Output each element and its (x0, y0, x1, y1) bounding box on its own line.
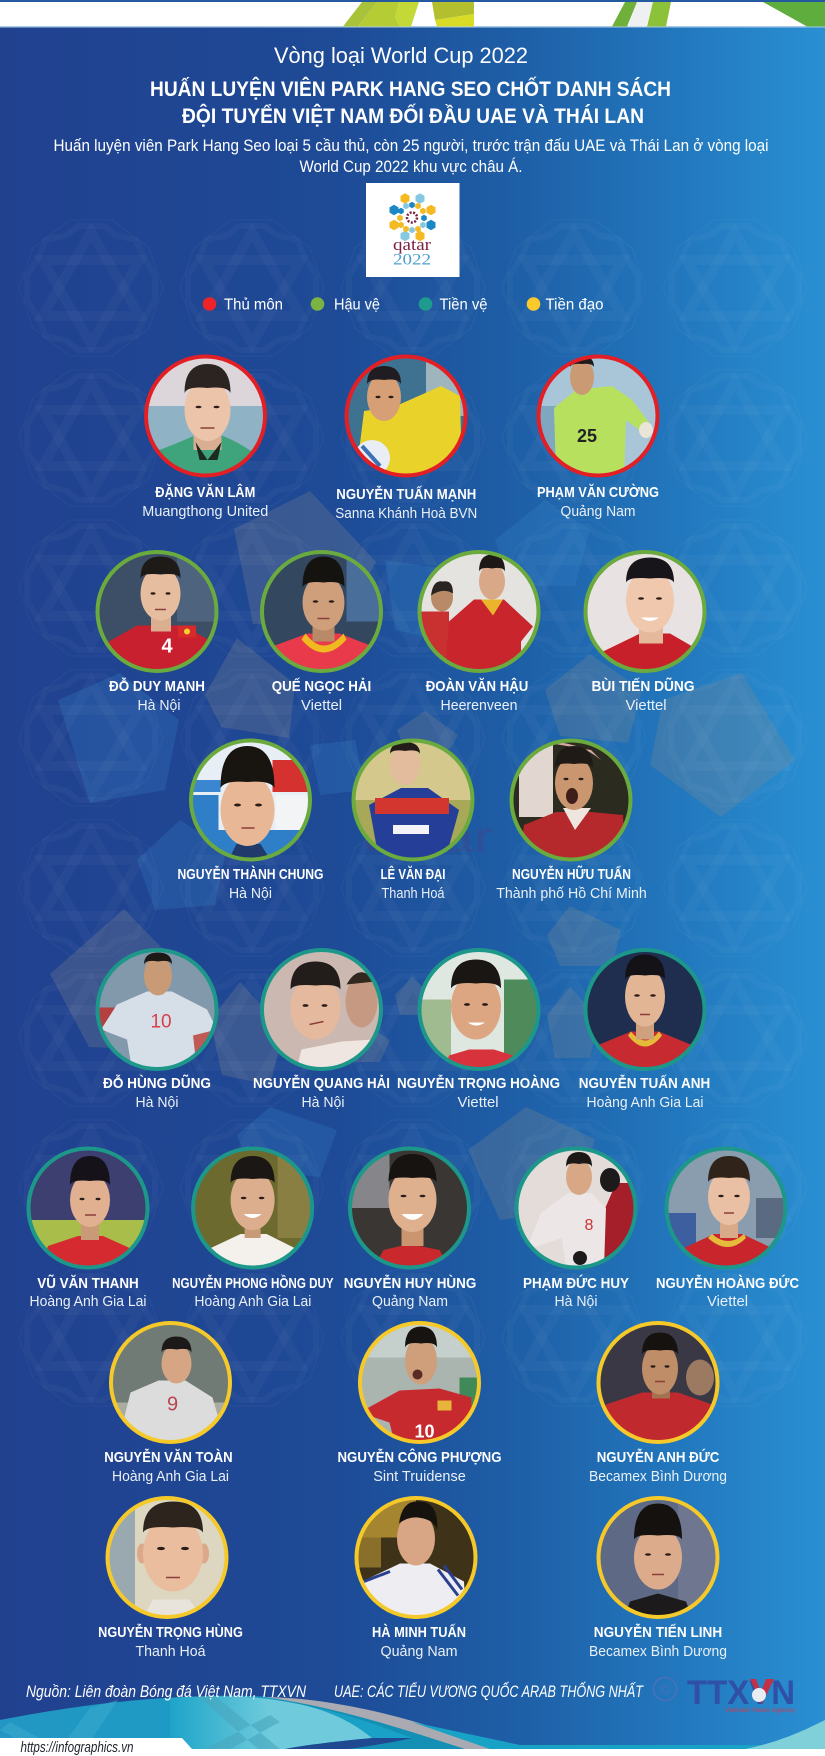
player: Nguyễn Tuấn Anh (579, 950, 710, 1111)
player: Nguyễn Công Phượng (338, 1322, 502, 1485)
player: Nguyễn Hữu Tuấn: Thành phố Hồ Chí Minh (496, 885, 647, 902)
player: Nguyễn Anh Đức (589, 1322, 727, 1485)
main heading line 2: ĐỘI TUYỂN VIỆT NAM ĐỐI ĐẦU UAE VÀ THÁI LAN (182, 104, 644, 128)
player: Nguyễn Hoàng Đức: Viettel (707, 1293, 748, 1310)
header text block (54, 43, 768, 176)
player: Phạm Văn Cường: 25 (577, 426, 597, 446)
player: Nguyễn Trọng Hoàng: NGUYỄN TRỌNG HOÀNG (397, 1075, 560, 1092)
player: Nguyễn Phong Hồng Duy: Hoàng Anh Gia Lai (194, 1293, 311, 1310)
legend: Tiền vệ (440, 296, 488, 314)
player: Quế Ngọc Hải: Viettel (301, 697, 342, 714)
player: Nguyễn Tuấn Mạnh (335, 356, 477, 522)
player: Nguyễn Huy Hùng: Quảng Nam (372, 1293, 448, 1310)
player: Phạm Đức Huy: PHẠM ĐỨC HUY (523, 1274, 629, 1292)
player: Nguyễn Quang Hải: NGUYỄN QUANG HẢI (253, 1075, 390, 1092)
player: Đỗ Hùng Dũng (97, 950, 217, 1111)
player: Phạm Văn Cường: PHẠM VĂN CƯỜNG (537, 483, 659, 501)
player: Bùi Tiến Dũng: Viettel (626, 697, 666, 714)
player: Phạm Đức Huy: Hà Nội (554, 1293, 598, 1310)
player: Nguyễn Trọng Hùng: NGUYỄN TRỌNG HÙNG (98, 1623, 243, 1641)
player: Nguyễn Hoàng Đức: NGUYỄN HOÀNG ĐỨC (656, 1274, 799, 1292)
player: Nguyễn Hữu Tuấn: NGUYỄN HỮU TUẤN (512, 865, 631, 883)
legend: Thủ môn (224, 296, 283, 314)
player: Đoàn Văn Hậu (419, 552, 539, 714)
Qatar 2022 logo (366, 183, 460, 277)
player: Nguyễn Trọng Hùng (98, 1498, 243, 1660)
player: Phạm Đức Huy (516, 1148, 636, 1310)
player: Hà Minh Tuấn: HÀ MINH TUẤN (372, 1624, 466, 1641)
player: Nguyễn Huy Hùng (344, 1148, 476, 1310)
faint qatar watermark: qatar (363, 813, 493, 862)
player: Phạm Văn Cường (537, 356, 659, 520)
top banner (0, 0, 825, 28)
player: Nguyễn Hoàng Đức (656, 1148, 799, 1310)
player: Nguyễn Văn Toàn (104, 1322, 233, 1485)
url tab: https://infographics.vn (20, 1740, 134, 1756)
player: Vũ Văn Thanh: Hoàng Anh Gia Lai (30, 1293, 146, 1310)
player: Đoàn Văn Hậu: Heerenveen (440, 697, 518, 714)
player: Nguyễn Quang Hải: Hà Nội (302, 1094, 344, 1111)
background: medallion pattern (19, 220, 807, 1406)
player: Đỗ Hùng Dũng: ĐỖ HÙNG DŨNG (103, 1074, 211, 1092)
player: Nguyễn Anh Đức: Becamex Bình Dương (589, 1468, 727, 1485)
player: Nguyễn Huy Hùng: NGUYỄN HUY HÙNG (344, 1274, 476, 1292)
player: Lê Văn Đại (353, 740, 473, 902)
intro line 1: Huấn luyện viên Park Hang Seo loại 5 cầu thủ, còn 25 người, trước trận đấu UAE và Thái Lan ở vòng loại (54, 137, 768, 155)
player: Bùi Tiến Dũng (585, 552, 705, 714)
player: Nguyễn Trọng Hoàng: Viettel (458, 1094, 498, 1111)
TTXVN logo: Vietnam News Agency (725, 1707, 796, 1714)
player: Nguyễn Công Phượng: 10 (414, 1422, 435, 1442)
player: Hà Minh Tuấn (356, 1498, 476, 1660)
intro line 2: World Cup 2022 khu vực châu Á. (300, 157, 522, 176)
abbreviation note: UAE: CÁC TIỂU VƯƠNG QUỐC ARAB THỐNG NHẤT (334, 1682, 644, 1701)
title kicker: Vòng loại World Cup 2022 (274, 43, 528, 68)
player: Phạm Văn Cường: Quảng Nam (560, 503, 636, 520)
player: Nguyễn Tiến Linh: Becamex Bình Dương (589, 1643, 727, 1660)
player: Nguyễn Công Phượng: NGUYỄN CÔNG PHƯỢNG (338, 1448, 502, 1466)
player: Nguyễn Văn Toàn: Hoàng Anh Gia Lai (112, 1468, 229, 1485)
player: Quế Ngọc Hải (262, 552, 382, 714)
player: Bùi Tiến Dũng: BÙI TIẾN DŨNG (592, 677, 694, 695)
player: Đỗ Hùng Dũng: 10 (150, 1012, 172, 1032)
player: Nguyễn Thành Chung: NGUYỄN THÀNH CHUNG (178, 866, 324, 883)
player: Nguyễn Thành Chung: Hà Nội (229, 885, 272, 902)
TTXVN logo: © (659, 1682, 671, 1699)
player: Nguyễn Thành Chung (178, 740, 324, 902)
TTXVN logo: TTXVN (687, 1674, 795, 1712)
Qatar 2022 logo: qatar (393, 235, 431, 254)
player: Đặng Văn Lâm: Muangthong United (142, 503, 268, 520)
legend (203, 296, 603, 314)
player: Nguyễn Tuấn Anh: Hoàng Anh Gia Lai (586, 1094, 704, 1111)
player: Quế Ngọc Hải: QUẾ NGỌC HẢI (272, 678, 371, 695)
player: Nguyễn Hữu Tuấn (496, 740, 647, 902)
player: Lê Văn Đại: LÊ VĂN ĐẠI (380, 865, 446, 883)
player: Đỗ Duy Mạnh: 4 (161, 636, 173, 658)
player: Nguyễn Tuấn Anh: NGUYỄN TUẤN ANH (579, 1075, 710, 1092)
player: Đặng Văn Lâm: ĐẶNG VĂN LÂM (155, 483, 255, 501)
Qatar 2022 logo: 2022 (393, 252, 431, 268)
bottom wave band (0, 1696, 825, 1756)
player: Nguyễn Trọng Hùng: Thanh Hoá (136, 1643, 206, 1660)
player: Nguyễn Phong Hồng Duy (172, 1148, 334, 1310)
player: Nguyễn Văn Toàn: NGUYỄN VĂN TOÀN (104, 1449, 233, 1466)
player: Nguyễn Tiến Linh: NGUYỄN TIẾN LINH (594, 1624, 722, 1641)
player: Đặng Văn Lâm (142, 356, 268, 520)
player: Đoàn Văn Hậu: ĐOÀN VĂN HẬU (426, 677, 528, 695)
player: Đỗ Duy Mạnh (97, 552, 217, 714)
main heading line 1: HUẤN LUYỆN VIÊN PARK HANG SEO CHỐT DANH SÁCH (150, 77, 671, 101)
player: Đỗ Duy Mạnh: Hà Nội (138, 697, 180, 714)
player: Nguyễn Tiến Linh (589, 1498, 727, 1660)
player: Nguyễn Anh Đức: NGUYỄN ANH ĐỨC (597, 1448, 719, 1466)
legend: Hậu vệ (334, 296, 380, 314)
player: Nguyễn Trọng Hoàng (397, 950, 560, 1111)
legend: Tiền đạo (546, 296, 604, 314)
player: Đỗ Hùng Dũng: Hà Nội (136, 1094, 178, 1111)
player: Nguyễn Phong Hồng Duy: NGUYỄN PHONG HỒNG DUY (172, 1274, 334, 1292)
player: Vũ Văn Thanh (28, 1148, 148, 1310)
player: Phạm Đức Huy: 8 (585, 1217, 594, 1234)
url tab (0, 1738, 192, 1756)
player: Nguyễn Công Phượng: Sint Truidense (373, 1468, 466, 1485)
player: Nguyễn Văn Toàn: 9 (167, 1394, 178, 1416)
player: Đỗ Duy Mạnh: ĐỖ DUY MẠNH (109, 677, 205, 695)
player: Hà Minh Tuấn: Quảng Nam (380, 1643, 458, 1660)
source note: Nguồn: Liên đoàn Bóng đá Việt Nam, TTXVN (26, 1682, 307, 1701)
player: Vũ Văn Thanh: VŨ VĂN THANH (37, 1274, 139, 1292)
player: Nguyễn Tuấn Mạnh: Sanna Khánh Hoà BVN (335, 505, 477, 522)
player: Nguyễn Quang Hải (253, 950, 390, 1111)
player: Lê Văn Đại: Thanh Hoá (382, 885, 445, 902)
background: enlarged logo pentagons (50, 491, 795, 1220)
player: Nguyễn Tuấn Mạnh: NGUYỄN TUẤN MẠNH (336, 486, 476, 503)
